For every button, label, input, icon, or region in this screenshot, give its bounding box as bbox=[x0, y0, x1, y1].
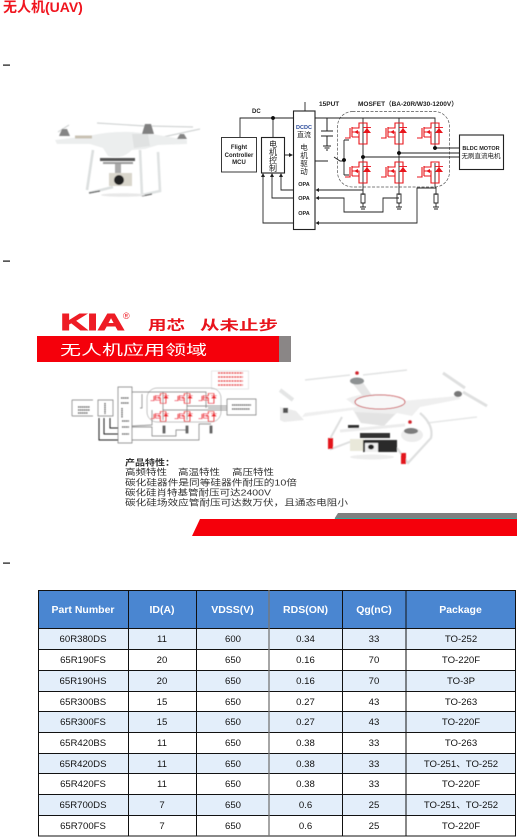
row 65R700FS bbox=[60, 821, 480, 832]
features: three properties: 高温特性 bbox=[178, 467, 221, 477]
header row: RDS(ON) bbox=[283, 604, 328, 616]
slogan: 从未止步 bbox=[200, 317, 278, 333]
features: line 1: 碳化硅器件是同等硅器件耐压的10倍 bbox=[125, 478, 298, 488]
small circuit diagram bbox=[72, 371, 256, 443]
teal accent line bbox=[335, 518, 517, 519]
block text bbox=[78, 398, 251, 434]
KIA logo bbox=[60, 309, 130, 335]
features: three properties bbox=[125, 467, 275, 477]
row 65R700FS: 650 bbox=[225, 821, 241, 832]
flight controller box bbox=[222, 138, 256, 172]
row 65R420BS: 65R420BS bbox=[60, 738, 106, 749]
row 65R420DS: TO-251、TO-252 bbox=[424, 759, 498, 770]
header row: ID(A) bbox=[149, 604, 175, 616]
camera gimbal bbox=[348, 425, 359, 428]
row 65R420DS: 65R420DS bbox=[60, 759, 106, 770]
motor control box: 控 bbox=[269, 155, 277, 165]
row 65R190HS: 650 bbox=[225, 676, 241, 687]
row 65R190FS: 70 bbox=[369, 655, 379, 666]
flight controller box: MCU bbox=[232, 160, 246, 166]
row 65R420BS: TO-263 bbox=[445, 738, 477, 749]
bottom red strip bbox=[192, 519, 517, 536]
sense resistors and grounds bbox=[360, 194, 439, 209]
row 65R700DS bbox=[60, 800, 498, 811]
motor control box bbox=[262, 138, 284, 173]
row 65R190HS bbox=[60, 676, 475, 687]
motor control box: 电 bbox=[269, 139, 277, 149]
row 60R380DS: TO-252 bbox=[445, 634, 477, 645]
BLDC motor box: BLDC MOTOR bbox=[462, 146, 500, 152]
sense resistors bbox=[163, 426, 212, 433]
row 65R420FS: 11 bbox=[157, 779, 167, 790]
flight controller box: Flight bbox=[231, 145, 247, 151]
row 65R420FS: 65R420FS bbox=[60, 779, 106, 790]
row 65R700DS: 650 bbox=[225, 800, 241, 811]
driver block bbox=[294, 111, 315, 230]
slogan bbox=[148, 317, 278, 333]
MOSFET bridge, high and low sides bbox=[345, 123, 443, 183]
row 65R420BS: 650 bbox=[225, 738, 241, 749]
table grid bbox=[38, 590, 516, 836]
row 65R300BS: 15 bbox=[157, 697, 167, 708]
driver block: 机 bbox=[300, 150, 308, 160]
input label: 15PUT bbox=[319, 101, 339, 108]
features: three properties: 高压特性 bbox=[232, 467, 275, 477]
row 65R300FS: 65R300FS bbox=[60, 717, 106, 728]
red note box bbox=[212, 371, 248, 389]
row 65R190FS: 0.16 bbox=[296, 655, 315, 666]
row 65R190HS: 70 bbox=[369, 676, 379, 687]
controller boxes bbox=[72, 387, 256, 443]
row 65R190HS: 0.16 bbox=[296, 676, 315, 687]
row 65R300FS: TO-220F bbox=[442, 717, 480, 728]
driver block: OPA bbox=[298, 211, 310, 217]
product features text bbox=[125, 458, 349, 508]
rear legs bbox=[331, 417, 355, 449]
banner: application field bbox=[37, 336, 291, 362]
bottom gray strip bbox=[334, 513, 517, 518]
image: white quadcopter with camera bbox=[55, 123, 200, 197]
row 65R700DS: 0.6 bbox=[299, 800, 312, 811]
row 60R380DS bbox=[60, 634, 477, 645]
row 60R380DS: 0.34 bbox=[296, 634, 315, 645]
circuit diagram: brushless motor drive bbox=[222, 100, 504, 230]
row 65R700FS: 65R700FS bbox=[60, 821, 106, 832]
arms and body bbox=[302, 394, 461, 426]
section marker 3 bbox=[3, 562, 10, 564]
row 65R420BS bbox=[60, 738, 477, 749]
driver block: DCDC bbox=[296, 125, 312, 131]
motors bbox=[350, 378, 364, 384]
row 65R420BS: 0.38 bbox=[296, 738, 315, 749]
header row: Package bbox=[439, 604, 482, 616]
row 65R420FS: TO-220F bbox=[442, 779, 480, 790]
row 65R300BS: 65R300BS bbox=[60, 697, 106, 708]
row 65R420FS bbox=[60, 779, 480, 790]
section marker 1 bbox=[3, 64, 10, 66]
row 65R420DS: 11 bbox=[157, 759, 167, 770]
row 65R420DS bbox=[60, 759, 498, 770]
row 60R380DS: 600 bbox=[225, 634, 241, 645]
row 60R380DS: 60R380DS bbox=[60, 634, 106, 645]
propellers bbox=[305, 370, 407, 380]
wiring bbox=[240, 102, 459, 195]
row 65R190FS: TO-220F bbox=[442, 655, 480, 666]
row 65R420DS: 650 bbox=[225, 759, 241, 770]
driver block: OPA bbox=[298, 182, 310, 188]
row 65R190HS: 20 bbox=[157, 676, 167, 687]
arrowheads bbox=[261, 153, 319, 225]
KIA logo: ® bbox=[123, 311, 130, 321]
image: white drone with red landing gear bbox=[280, 370, 487, 464]
wiring bbox=[132, 392, 227, 440]
section marker 2 bbox=[3, 260, 10, 262]
row 65R700FS: TO-220F bbox=[442, 821, 480, 832]
alternating row backgrounds bbox=[39, 628, 515, 815]
driver block: 电 bbox=[300, 142, 308, 152]
row 65R700FS: 0.6 bbox=[299, 821, 312, 832]
row 65R190FS: 650 bbox=[225, 655, 241, 666]
banner: application field: 无人机应用领域 bbox=[60, 342, 207, 358]
row 65R700FS: 25 bbox=[369, 821, 379, 832]
DC label: DC bbox=[252, 109, 261, 115]
features heading: 产品特性： bbox=[125, 458, 175, 468]
enclosure bbox=[147, 388, 221, 422]
row 65R420DS: 0.38 bbox=[296, 759, 315, 770]
row 65R300BS: 650 bbox=[225, 697, 241, 708]
BLDC motor box: 无刷直流电机 bbox=[462, 151, 501, 160]
row 65R420FS: 650 bbox=[225, 779, 241, 790]
row 65R190FS: 65R190FS bbox=[60, 655, 106, 666]
row 65R420FS: 0.38 bbox=[296, 779, 315, 790]
product parameter table bbox=[38, 590, 516, 836]
row 65R700DS: 25 bbox=[369, 800, 379, 811]
row 65R300FS: 650 bbox=[225, 717, 241, 728]
row 60R380DS: 33 bbox=[369, 634, 379, 645]
driver block: 驱 bbox=[300, 159, 308, 168]
row 65R300FS: 43 bbox=[369, 717, 379, 728]
row 65R420BS: 11 bbox=[157, 738, 167, 749]
header row: VDSS(V) bbox=[211, 604, 254, 616]
header row bbox=[38, 590, 515, 628]
features: line 3: 碳化硅场效应管耐压可达数万伏，且通态电阻小 bbox=[125, 498, 349, 508]
front prop and pod bbox=[340, 425, 405, 431]
heavy feedback lines bbox=[99, 418, 118, 440]
red feet bbox=[328, 438, 333, 449]
row 65R190HS: 65R190HS bbox=[60, 676, 106, 687]
row 65R190FS bbox=[60, 655, 480, 666]
row 65R300FS: 15 bbox=[157, 717, 167, 728]
BLDC motor box bbox=[460, 135, 504, 170]
driver block: 动 bbox=[300, 166, 308, 176]
row 65R300BS: TO-263 bbox=[445, 697, 477, 708]
row 60R380DS: 11 bbox=[157, 634, 167, 645]
MOSFET dashed enclosure bbox=[338, 112, 450, 187]
row 65R300FS: 0.27 bbox=[296, 717, 315, 728]
red MOSFETs bbox=[150, 394, 217, 421]
column divider bbox=[268, 590, 270, 836]
row 65R700DS: 65R700DS bbox=[60, 800, 106, 811]
slogan: 用芯 bbox=[148, 318, 186, 333]
junction dots bbox=[271, 116, 437, 162]
features: three properties: 高频特性 bbox=[125, 467, 168, 477]
row 65R700DS: TO-251、TO-252 bbox=[424, 800, 498, 811]
flight controller box: Controller bbox=[225, 153, 254, 159]
row 65R300BS bbox=[60, 697, 477, 708]
motor control box: 机 bbox=[269, 147, 277, 157]
MOSFET label: MOSFET（BA-20R/W30-1200V） bbox=[358, 100, 458, 108]
driver block: OPA bbox=[298, 196, 310, 202]
row 65R420BS: 33 bbox=[369, 738, 379, 749]
row 65R420DS: 33 bbox=[369, 759, 379, 770]
row 65R300BS: 43 bbox=[369, 697, 379, 708]
row 65R700DS: 7 bbox=[159, 800, 165, 811]
driver block: 直流 bbox=[297, 130, 311, 139]
row 65R300BS: 0.27 bbox=[296, 697, 315, 708]
row 65R190FS: 20 bbox=[157, 655, 167, 666]
row 65R420FS: 33 bbox=[369, 779, 379, 790]
row 65R700FS: 7 bbox=[159, 821, 165, 832]
header row: Part Number bbox=[51, 604, 115, 616]
row 65R300FS bbox=[60, 717, 480, 728]
features: line 2: 碳化硅肖特基管耐压可达2400V bbox=[125, 488, 271, 498]
row 65R190HS: TO-3P bbox=[447, 676, 475, 687]
KIA logo: KIA bbox=[60, 309, 125, 335]
header row: Qg(nC) bbox=[356, 604, 392, 616]
motor control box: 制 bbox=[269, 163, 277, 173]
